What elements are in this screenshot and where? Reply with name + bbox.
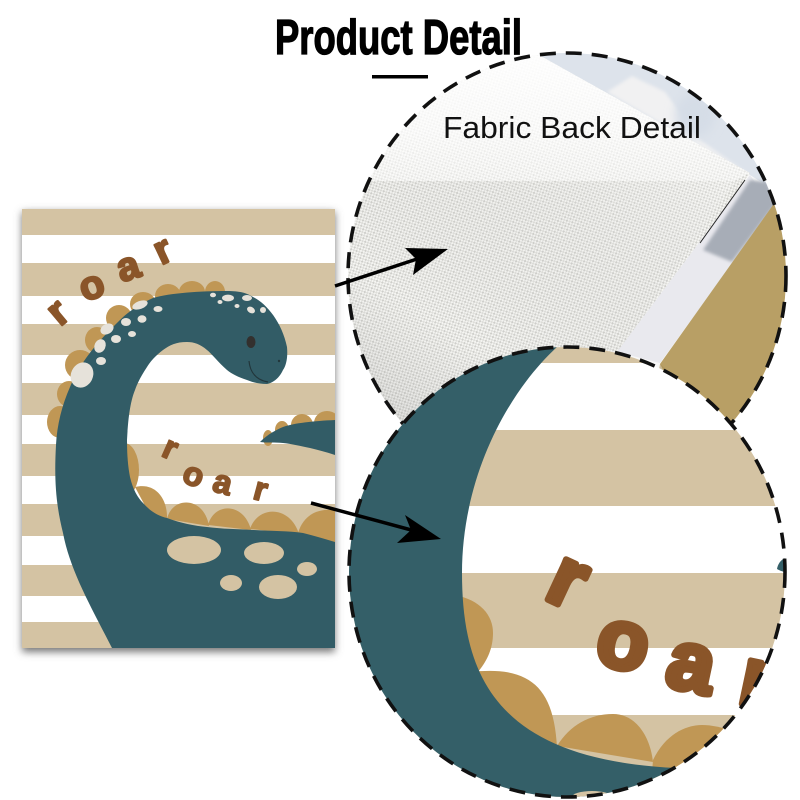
roar text lower [161, 439, 270, 501]
plates zoomed [462, 597, 724, 779]
title underline [372, 75, 428, 78]
roar text zoomed: r [732, 628, 784, 727]
background photo top right [540, 53, 767, 185]
belly spots [167, 536, 317, 599]
roar text upper: o [73, 261, 111, 311]
roar text zoomed: o [589, 588, 659, 691]
arrow: to print [311, 503, 441, 543]
small tail tip [777, 558, 785, 572]
dinosaur back plates [47, 281, 340, 545]
dinosaur neck zoomed [349, 347, 671, 797]
arrow: to fabric [335, 248, 448, 286]
panel: poster with dinosaur [22, 209, 340, 652]
dinosaur face [246, 336, 280, 382]
white backing strip [618, 176, 753, 363]
roar text zoomed: a [659, 611, 726, 713]
title: Product Detail [275, 11, 522, 65]
roar text upper: r [38, 290, 78, 334]
dinosaur tail tip [260, 420, 335, 455]
panel: fabric back detail circle [346, 51, 788, 426]
fabric weave surface [340, 50, 750, 440]
roar text lower: r [250, 469, 272, 508]
label: fabric back detail: Fabric Back Detail [443, 110, 701, 145]
panel: print zoom circle [340, 340, 800, 800]
roar text lower: o [178, 453, 210, 495]
small belly spot [573, 791, 607, 797]
dinosaur body [55, 291, 335, 648]
roar text upper: r [146, 227, 179, 273]
roar text lower: a [209, 462, 237, 502]
roar text upper: a [111, 242, 146, 291]
roar text upper [47, 238, 170, 326]
roar text lower: r [157, 428, 184, 467]
kraft paper [660, 205, 786, 421]
roar text zoomed: r [535, 528, 604, 627]
neck spots [67, 293, 266, 391]
roar text zoomed [544, 556, 766, 706]
